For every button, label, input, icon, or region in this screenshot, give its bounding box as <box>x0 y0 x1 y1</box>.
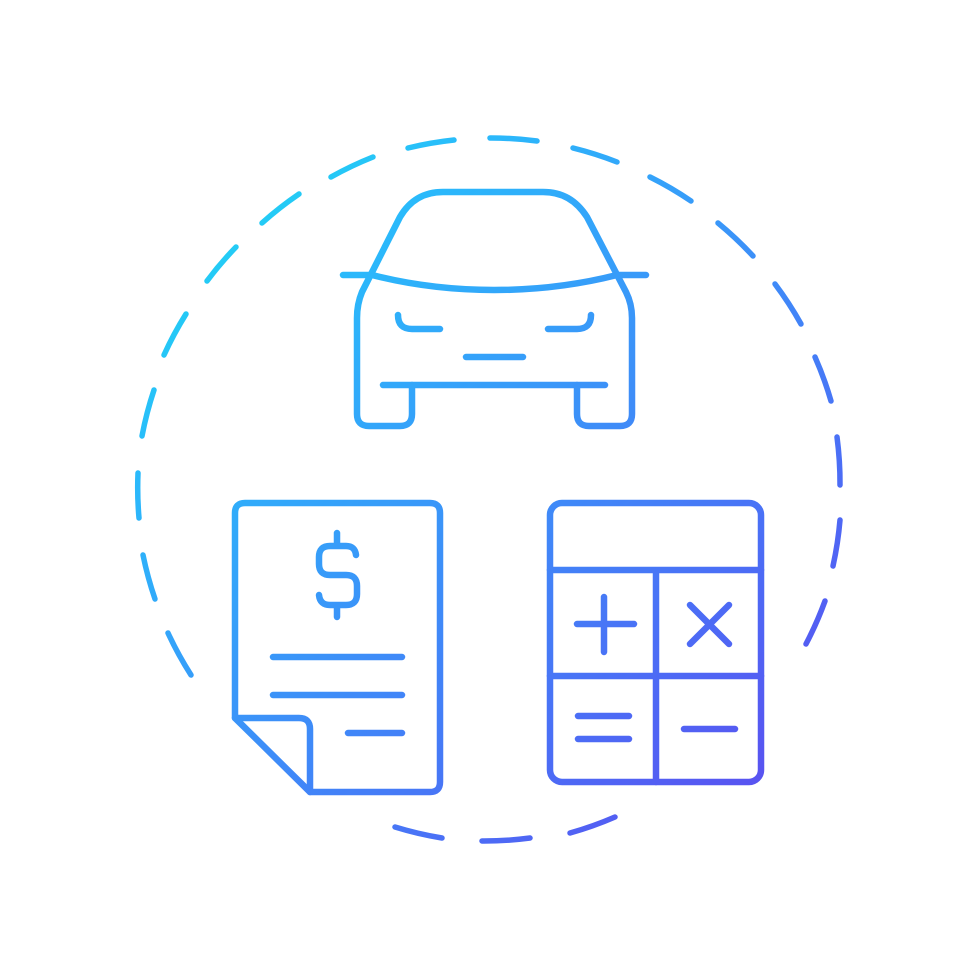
document outline <box>235 503 440 792</box>
dollar sign <box>319 533 357 617</box>
folded corner <box>235 718 310 792</box>
plus key <box>577 597 634 652</box>
icon: car <box>343 192 646 426</box>
calculator grid <box>550 570 761 782</box>
multiply key <box>690 605 729 644</box>
icon: calculator <box>550 503 761 782</box>
text lines <box>273 657 402 733</box>
windshield and mirrors <box>343 275 646 290</box>
dashed circle <box>138 138 840 841</box>
calculator frame <box>550 503 761 782</box>
grille <box>466 354 523 360</box>
bumper <box>383 382 605 388</box>
minus key <box>684 726 735 732</box>
right headlight <box>548 315 591 329</box>
equals key <box>578 716 629 739</box>
icon: invoice document <box>235 503 440 792</box>
car body <box>357 192 632 426</box>
left headlight <box>398 315 440 329</box>
